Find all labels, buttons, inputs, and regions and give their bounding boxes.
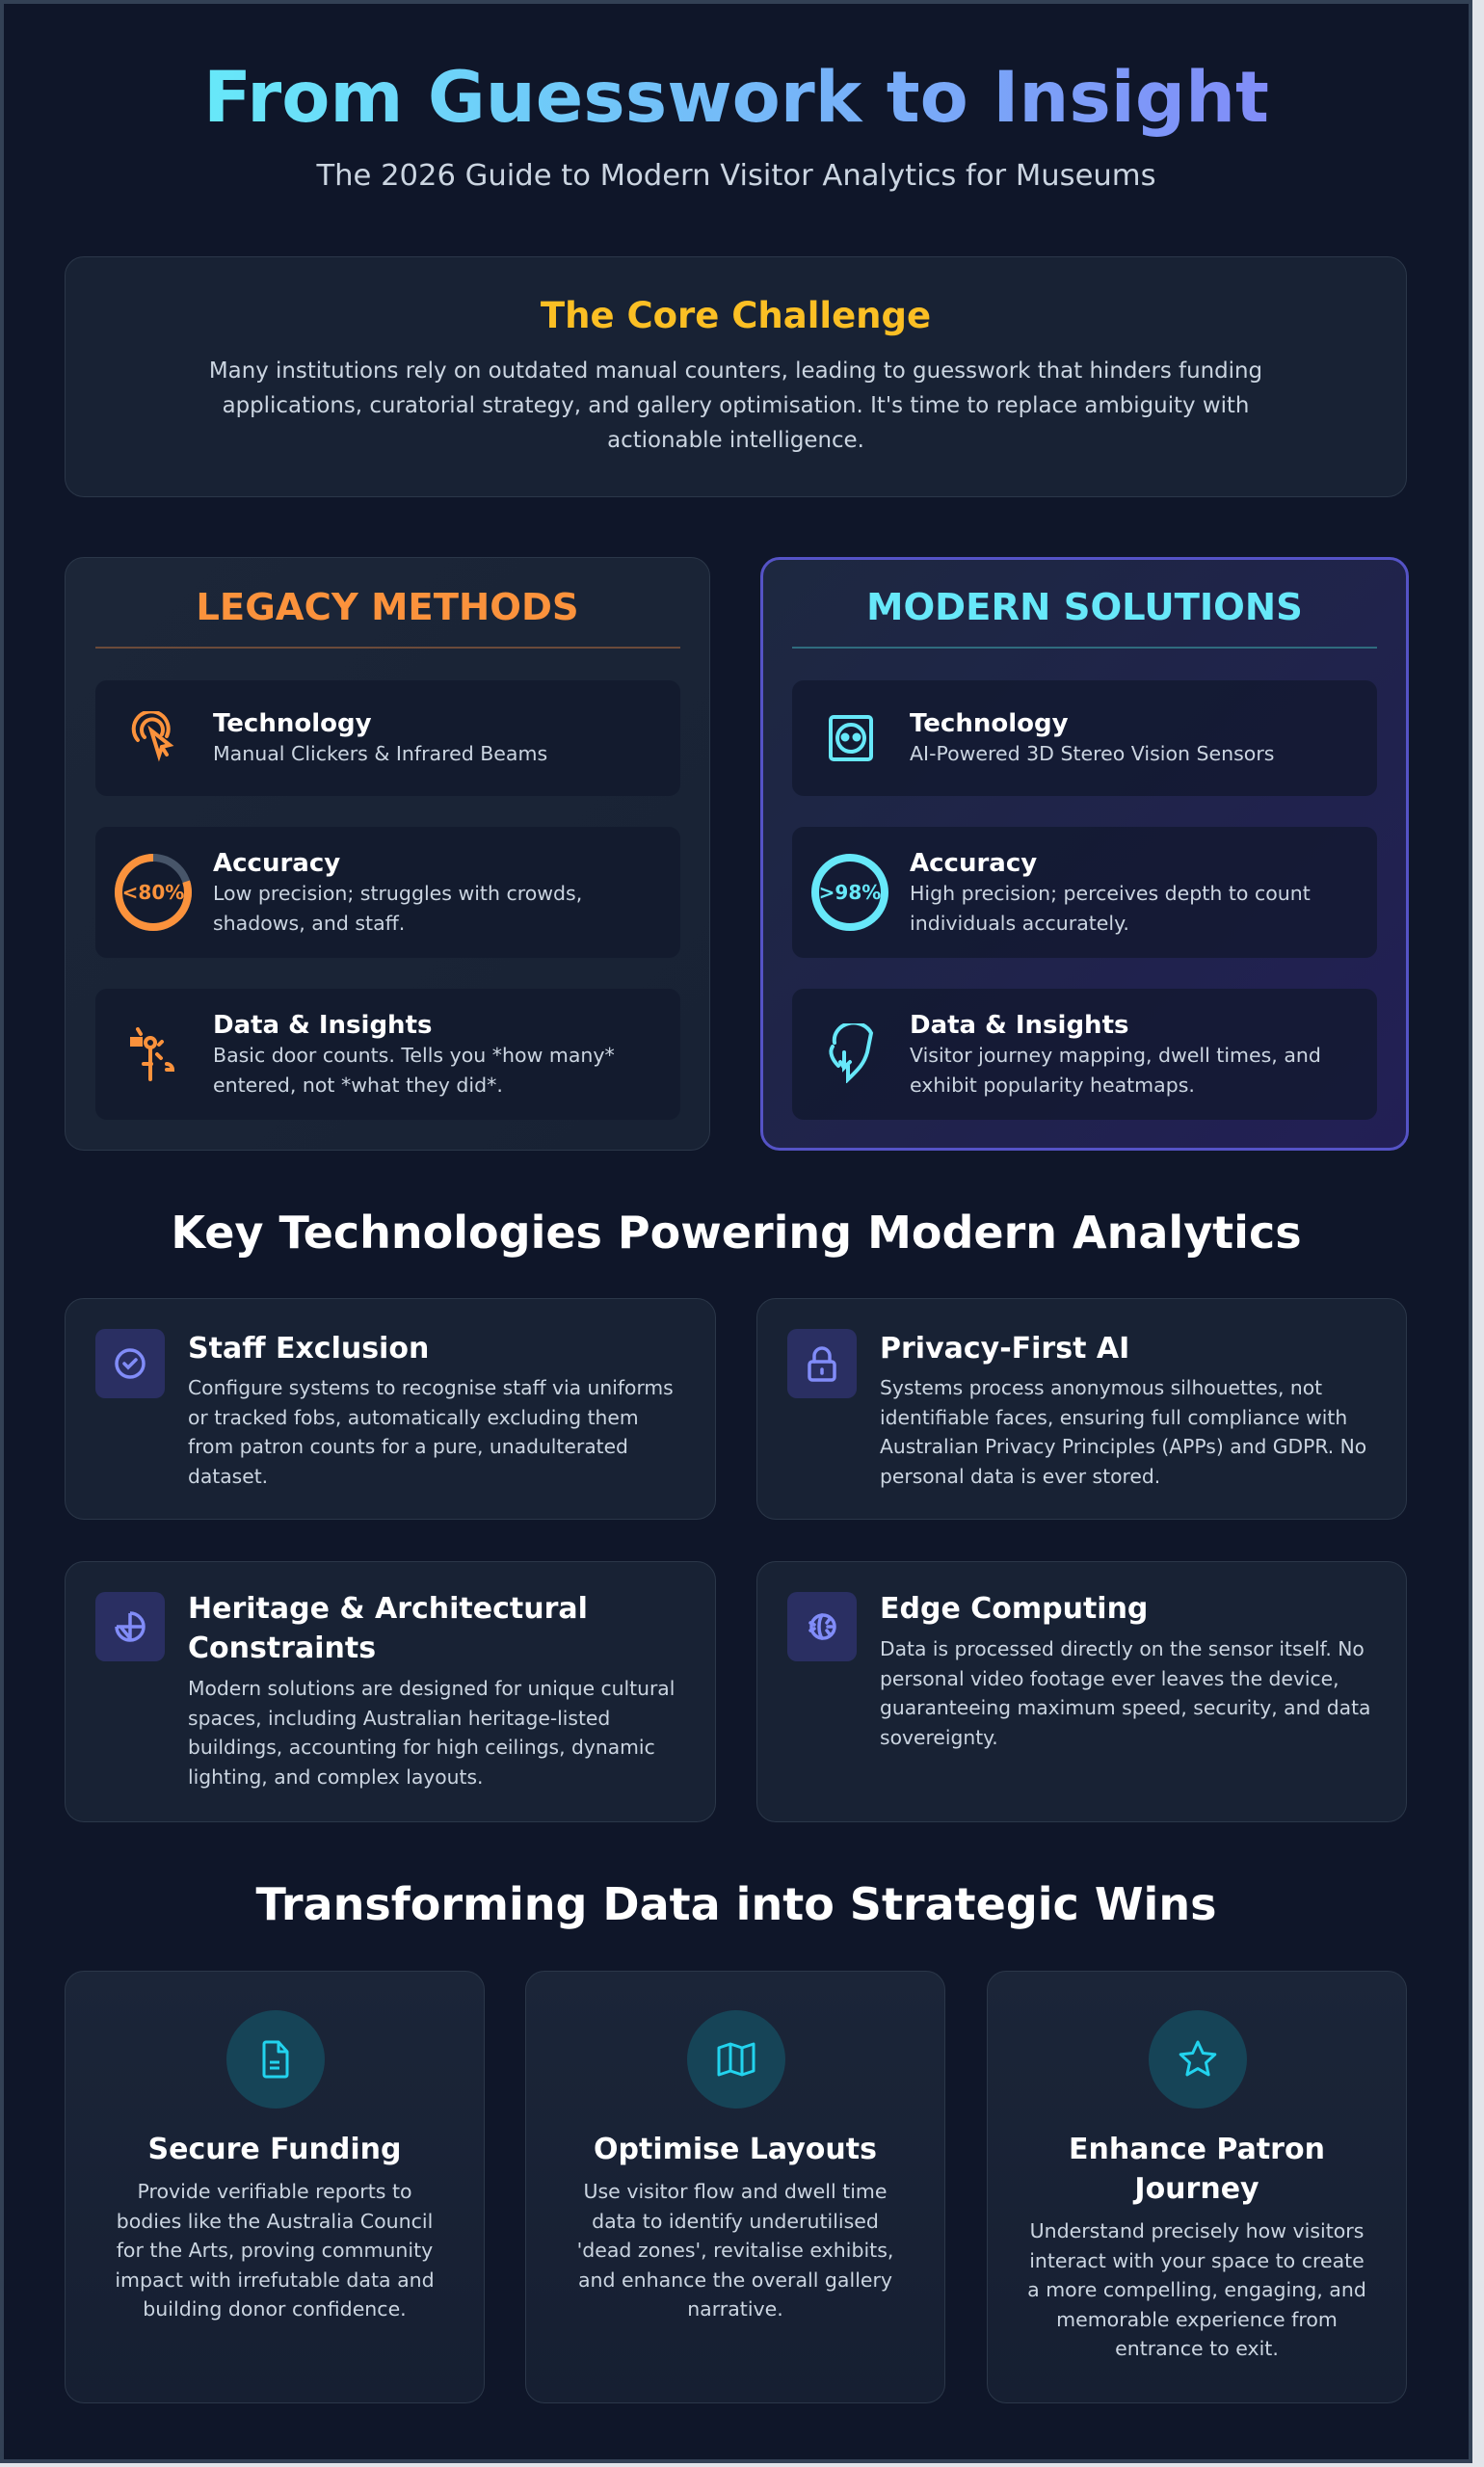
icon: heritage [95, 1592, 165, 1661]
panel: secure funding: Secure Funding [148, 2133, 401, 2166]
row: legacy accuracy [95, 827, 680, 958]
panel: enhance patron journey: Journey [1134, 2172, 1259, 2206]
text: challenge description: actionable intelligence. [607, 428, 864, 453]
panel: enhance patron journey: entrance to exit. [1115, 2337, 1279, 2360]
panel: staff exclusion [65, 1298, 716, 1520]
panel: heritage constraints: Constraints [188, 1631, 376, 1665]
panel: heritage constraints: spaces, including Australian heritage-listed [188, 1706, 610, 1729]
panel: optimise layouts: Use visitor flow and dwell time [584, 2180, 887, 2203]
panel: secure funding: impact with irrefutable data and [115, 2268, 435, 2292]
panel: heritage constraints: Modern solutions are designed for unique cultural [188, 1677, 675, 1700]
panel: privacy-first AI: Systems process anonymous silhouettes, not [880, 1376, 1322, 1399]
row: legacy technology [95, 680, 680, 796]
panel: heritage constraints [65, 1561, 716, 1822]
text: challenge description: Many institutions rely on outdated manual counters, leading to guesswork that hinders funding [209, 358, 1262, 384]
icon: door count [130, 1027, 174, 1081]
panel: optimise layouts: 'dead zones', revitalise exhibits, [577, 2239, 893, 2262]
icon: accuracy ring <80%: <80% [122, 881, 184, 904]
panel: optimise layouts [525, 1971, 945, 2403]
panel: core challenge [65, 256, 1407, 497]
icon: accuracy ring <80% [115, 854, 192, 931]
panel: staff exclusion: or tracked fobs, automatically excluding them [188, 1405, 639, 1428]
row: legacy data [95, 989, 680, 1120]
row: modern accuracy: Accuracy [910, 849, 1037, 878]
panel: edge computing: guaranteeing maximum speed, security, and data [880, 1696, 1370, 1719]
panel: modern solutions [760, 557, 1409, 1151]
row: legacy technology: Technology [213, 709, 372, 738]
panel: edge computing: personal video footage ever leaves the device, [880, 1667, 1339, 1690]
panel: heritage constraints: buildings, accounting for high ceilings, dynamic [188, 1736, 655, 1759]
title: From Guesswork to Insight [203, 57, 1269, 139]
heading: core challenge: The Core Challenge [541, 295, 931, 336]
text: challenge description [209, 358, 1262, 453]
icon: lock [787, 1329, 857, 1398]
panel: edge computing: sovereignty. [880, 1725, 998, 1748]
panel: secure funding: Provide verifiable reports to [137, 2180, 412, 2203]
row: modern technology: AI-Powered 3D Stereo Vision Sensors [910, 742, 1274, 765]
panel: legacy methods [65, 557, 710, 1151]
row: modern data: exhibit popularity heatmaps. [910, 1074, 1195, 1097]
panel: enhance patron journey: Understand precisely how visitors [1030, 2219, 1364, 2242]
icon: accuracy ring >98% [811, 854, 888, 931]
row: modern data [792, 989, 1377, 1120]
panel: heritage constraints: lighting, and complex layouts. [188, 1765, 484, 1789]
row: modern technology [792, 680, 1377, 796]
icon: check circle [95, 1329, 165, 1398]
panel: edge computing [756, 1561, 1407, 1822]
heading: modern solutions: MODERN SOLUTIONS [866, 586, 1303, 629]
subtitle: The 2026 Guide to Modern Visitor Analytics for Museums [316, 159, 1156, 193]
panel: staff exclusion: Configure systems to recognise staff via uniforms [188, 1376, 674, 1399]
icon: stereo sensor [829, 715, 873, 761]
panel: optimise layouts: narrative. [687, 2297, 783, 2321]
panel: enhance patron journey [987, 1971, 1407, 2403]
panel: secure funding: for the Arts, proving community [117, 2239, 433, 2262]
icon: star [1149, 2010, 1247, 2109]
icon: clicker [131, 711, 173, 761]
icon: journey map [829, 1023, 873, 1083]
panel: enhance patron journey: interact with your space to create [1029, 2249, 1365, 2272]
panel: staff exclusion: dataset. [188, 1465, 268, 1488]
panel: enhance patron journey: Enhance Patron [1069, 2133, 1325, 2166]
row: legacy accuracy: Low precision; struggles with crowds, [213, 882, 582, 905]
row: legacy data: entered, not *what they did*. [213, 1074, 503, 1097]
panel: staff exclusion: from patron counts for a pure, unadulterated [188, 1435, 628, 1458]
row: legacy data: Data & Insights [213, 1011, 432, 1040]
panel: secure funding [65, 1971, 485, 2403]
row: legacy data: Basic door counts. Tells you *how many* [213, 1044, 615, 1067]
panel: privacy-first AI: identifiable faces, ensuring full compliance with [880, 1405, 1347, 1428]
icon: document [226, 2010, 325, 2109]
row: legacy accuracy: shadows, and staff. [213, 912, 405, 935]
row: modern accuracy: individuals accurately. [910, 912, 1129, 935]
panel: privacy-first AI: Australian Privacy Principles (APPs) and GDPR. No [880, 1435, 1366, 1458]
row: modern accuracy: High precision; perceives depth to count [910, 882, 1311, 905]
heading: key technologies: Key Technologies Powering Modern Analytics [171, 1207, 1302, 1259]
panel: secure funding: building donor confidence. [143, 2297, 407, 2321]
icon: accuracy ring >98%: >98% [819, 881, 881, 904]
icon: map [687, 2010, 785, 2109]
row: modern data: Visitor journey mapping, dwell times, and [910, 1044, 1321, 1067]
row: legacy accuracy: Accuracy [213, 849, 340, 878]
panel: enhance patron journey: memorable experience from [1056, 2307, 1338, 2330]
icon: edge chip [787, 1592, 857, 1661]
heading: legacy methods: LEGACY METHODS [196, 586, 579, 629]
text: challenge description: applications, curatorial strategy, and gallery optimisation. It's time to replace ambiguity with [223, 393, 1249, 418]
panel: privacy-first AI: personal data is ever stored. [880, 1465, 1160, 1488]
panel: staff exclusion: Staff Exclusion [188, 1332, 429, 1366]
row: modern accuracy [792, 827, 1377, 958]
panel: privacy-first AI [756, 1298, 1407, 1520]
row: legacy technology: Manual Clickers & Infrared Beams [213, 742, 547, 765]
panel: heritage constraints: Heritage & Architectural [188, 1592, 588, 1626]
panel: privacy-first AI: Privacy-First AI [880, 1332, 1129, 1366]
heading: transforming data: Transforming Data into Strategic Wins [256, 1878, 1216, 1930]
panel: edge computing: Edge Computing [880, 1592, 1148, 1626]
panel: optimise layouts: and enhance the overall gallery [578, 2268, 892, 2292]
panel: enhance patron journey: a more compelling, engaging, and [1027, 2278, 1366, 2301]
panel: secure funding: bodies like the Australia Council [117, 2209, 433, 2232]
panel: optimise layouts: data to identify underutilised [592, 2209, 879, 2232]
panel: optimise layouts: Optimise Layouts [594, 2133, 877, 2166]
row: modern technology: Technology [910, 709, 1069, 738]
panel: edge computing: Data is processed directly on the sensor itself. No [880, 1637, 1365, 1660]
row: modern data: Data & Insights [910, 1011, 1128, 1040]
